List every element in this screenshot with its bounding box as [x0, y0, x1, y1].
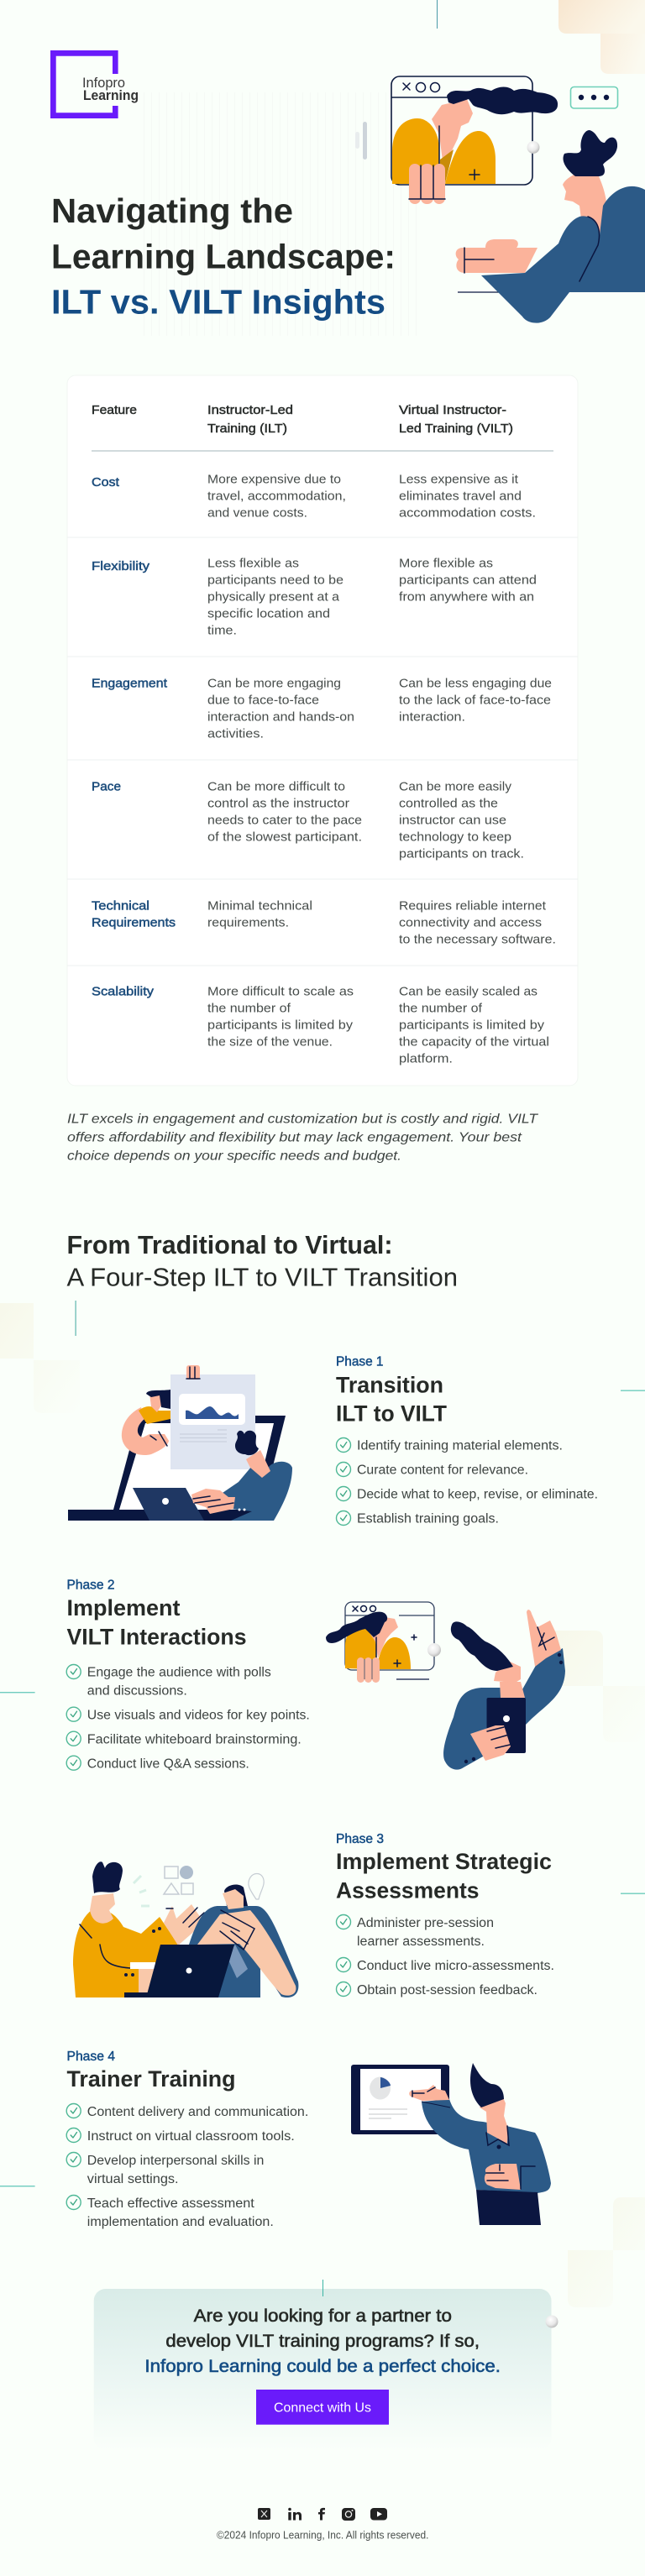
table row: Scalability: participants is limited by — [399, 1018, 545, 1033]
table row: Scalability: Can be easily scaled as — [399, 985, 538, 999]
table header row — [92, 403, 513, 436]
phase 2 text block: Phase 2 — [67, 1579, 114, 1593]
panel: call to action: Infopro Learning could be a perfect choice. — [144, 2357, 501, 2376]
title: Navigating the — [51, 191, 293, 230]
hero illustration: woman in video window and man at desk — [355, 76, 645, 323]
phase 4 text block: Phase 4 — [67, 2050, 115, 2064]
phase 3 text block: Phase 3 — [336, 1832, 384, 1846]
phase 1 text block: Curate content for relevance. — [357, 1463, 528, 1478]
checklist item icon — [66, 2104, 81, 2118]
panel: call to action: Are you looking for a partner to — [194, 2306, 452, 2326]
checklist item icon — [66, 1707, 81, 1721]
panel: call to action: develop VILT training programs? If so, — [165, 2332, 480, 2351]
table row: Flexibility: specific location and — [207, 607, 330, 621]
phase 2 text block: Facilitate whiteboard brainstorming. — [87, 1733, 302, 1747]
icon: YouTube — [370, 2508, 387, 2521]
phase 1 text block: Decide what to keep, revise, or eliminate. — [357, 1488, 598, 1502]
table row: Engagement: interaction and hands-on — [207, 710, 354, 725]
table row: Flexibility — [92, 557, 537, 638]
table row: Pace — [92, 780, 524, 861]
table row: Pace: control as the instructor — [207, 797, 349, 811]
table header row: Instructor-Led — [207, 403, 293, 417]
title: ILT vs. VILT Insights — [51, 282, 385, 321]
phase 4 text block — [66, 2050, 308, 2229]
table row: Engagement: Can be more engaging — [207, 677, 341, 691]
table row: Engagement: Engagement — [92, 677, 168, 691]
icon: X — [258, 2508, 270, 2520]
table header row: Led Training (VILT) — [399, 421, 513, 436]
checklist item icon — [336, 1914, 351, 1929]
phase 1 illustration: two people around a monitor and document — [68, 1365, 292, 1521]
phase 4 text block: Instruct on virtual classroom tools. — [87, 2129, 295, 2144]
table row: Technical Requirements: Minimal technical — [207, 899, 312, 914]
phase 2 text block: and discussions. — [87, 1684, 187, 1699]
checklist item icon — [66, 2195, 81, 2210]
phase 4 text block: virtual settings. — [87, 2172, 179, 2186]
table row: Flexibility: More flexible as — [399, 557, 493, 571]
phase 4 text block: implementation and evaluation. — [87, 2215, 274, 2229]
table row: Scalability: the number of — [399, 1002, 483, 1016]
table row: Flexibility: participants need to be — [207, 573, 343, 588]
phase 4 text block: Trainer Training — [67, 2066, 235, 2092]
button: Connect with Us — [256, 2390, 389, 2425]
table row: Flexibility: from anywhere with an — [399, 590, 534, 605]
table row: Pace: Pace — [92, 780, 121, 794]
checklist item icon — [66, 2128, 81, 2143]
phase 4 text block: Content delivery and communication. — [87, 2105, 308, 2119]
checklist item icon — [336, 1463, 351, 1476]
table row: Pace: controlled as the — [399, 797, 498, 811]
checklist item icon — [66, 2153, 81, 2166]
table header row: Feature — [92, 403, 137, 417]
table row: Scalability: the size of the venue. — [207, 1035, 333, 1050]
checklist item icon — [336, 1486, 351, 1501]
summary text: offers affordability and flexibility but may lack engagement. Your best — [67, 1131, 522, 1145]
table row: Technical Requirements: Technical — [92, 899, 149, 914]
table row: Technical Requirements: Requires reliable internet — [399, 899, 547, 914]
phase 3 text block: Implement Strategic — [336, 1849, 552, 1874]
icon: LinkedIn — [288, 2508, 302, 2521]
phase 3 text block: Assessments — [336, 1878, 479, 1903]
phase 2 text block: Implement — [67, 1595, 181, 1620]
phase 3 text block: learner assessments. — [357, 1935, 485, 1949]
checklist item icon — [336, 1511, 351, 1525]
phase 3 illustration: two colleagues with a laptop — [73, 1861, 298, 1997]
table row: Technical Requirements: connectivity and access — [399, 916, 542, 930]
table row: Scalability — [92, 985, 549, 1066]
table row: Cost: Less expensive as it — [399, 473, 519, 487]
table row: Cost — [92, 473, 536, 521]
phase 1 text block: Transition — [336, 1373, 443, 1398]
phase 1 text block: Phase 1 — [336, 1355, 383, 1369]
table row: Technical Requirements — [92, 899, 556, 947]
phase 1 text block: Establish training goals. — [357, 1512, 499, 1526]
table row: Scalability: More difficult to scale as — [207, 985, 354, 999]
logo: Infopro Learning: Learning — [83, 87, 139, 103]
table row: Flexibility: time. — [207, 624, 237, 638]
section heading: A Four-Step ILT to VILT Transition — [67, 1263, 458, 1292]
phase 4 illustration: trainer pointing at tablet screen — [351, 2063, 551, 2225]
checklist item icon — [66, 1664, 81, 1679]
table row: Flexibility: participants can attend — [399, 573, 537, 588]
table header row: Virtual Instructor- — [399, 403, 506, 417]
table row: Scalability: platform. — [399, 1052, 453, 1066]
table row: Cost: travel, accommodation, — [207, 490, 346, 504]
table row: Engagement: to the lack of face-to-face — [399, 694, 551, 708]
table row: Scalability: Scalability — [92, 985, 155, 999]
summary text — [67, 1113, 538, 1164]
phase 1 text block: ILT to VILT — [336, 1401, 447, 1427]
table row: Flexibility: Flexibility — [92, 559, 150, 573]
copyright: ©2024 Infopro Learning, Inc. All rights reserved. — [217, 2529, 428, 2541]
table row: Scalability: participants is limited by — [207, 1018, 354, 1033]
summary text: choice depends on your specific needs and budget. — [67, 1149, 401, 1164]
table row: Cost: eliminates travel and — [399, 490, 522, 504]
table row: Pace: of the slowest participant. — [207, 830, 362, 845]
section heading — [67, 1230, 458, 1292]
table row: Cost: accommodation costs. — [399, 506, 536, 521]
table row: Technical Requirements: Requirements — [92, 916, 176, 930]
table row: Pace: Can be more easily — [399, 780, 512, 794]
table row: Pace: Can be more difficult to — [207, 780, 345, 794]
table row: Pace: instructor can use — [399, 814, 506, 828]
table row: Scalability: the number of — [207, 1002, 291, 1016]
phase 3 text block: Administer pre-session — [357, 1916, 494, 1930]
table row: Flexibility: physically present at a — [207, 590, 340, 605]
table row: Pace: needs to cater to the pace — [207, 814, 362, 828]
phase 1 text block — [336, 1355, 598, 1526]
table row: Engagement: Can be less engaging due — [399, 677, 552, 691]
table row: Pace: technology to keep — [399, 830, 511, 845]
icon: Facebook — [318, 2508, 325, 2521]
checklist item icon — [66, 1756, 81, 1770]
section heading: From Traditional to Virtual: — [67, 1230, 393, 1259]
phase 2 text block: VILT Interactions — [67, 1624, 247, 1649]
decorative peach corner blocks — [558, 0, 645, 74]
checklist item icon — [336, 1958, 351, 1971]
checklist item icon — [336, 1437, 351, 1453]
logo: Infopro Learning: Infopro — [82, 75, 125, 91]
phase 2 text block: Use visuals and videos for key points. — [87, 1709, 310, 1723]
table row: Engagement: due to face-to-face — [207, 694, 319, 708]
button: Connect with Us: Connect with Us — [274, 2401, 371, 2416]
phase 4 text block: Develop interpersonal skills in — [87, 2154, 264, 2168]
table row: Technical Requirements: requirements. — [207, 916, 289, 930]
table row: Flexibility: Less flexible as — [207, 557, 299, 571]
checklist item icon — [336, 1982, 351, 1997]
table row: Cost: Cost — [92, 475, 120, 490]
table row: Technical Requirements: to the necessary software. — [399, 933, 556, 947]
phase 1 text block: Identify training material elements. — [357, 1439, 563, 1453]
phase 4 text block: Teach effective assessment — [87, 2196, 255, 2211]
table row: Cost: More expensive due to — [207, 473, 341, 487]
title — [51, 191, 396, 321]
phase 2 text block: Engage the audience with polls — [87, 1666, 271, 1680]
title: Learning Landscape: — [51, 237, 396, 275]
panel: call to action — [94, 2280, 558, 2450]
table row: Engagement: activities. — [207, 727, 264, 741]
phase 2 text block — [66, 1579, 310, 1772]
phase 3 text block — [336, 1832, 554, 1997]
phase 2 text block: Conduct live Q&A sessions. — [87, 1757, 249, 1772]
social media icons — [258, 2508, 387, 2521]
icon: Instagram — [342, 2508, 355, 2521]
logo: Infopro Learning — [50, 50, 139, 118]
phase 3 text block: Obtain post-session feedback. — [357, 1983, 538, 1997]
table header row: Training (ILT) — [207, 421, 287, 436]
checklist item icon — [66, 1731, 81, 1746]
phase 3 text block: Conduct live micro-assessments. — [357, 1959, 554, 1973]
table row: Cost: and venue costs. — [207, 506, 307, 521]
phase 2 illustration: video window and man with tablet — [326, 1602, 565, 1770]
table row: Scalability: the capacity of the virtual — [399, 1035, 549, 1050]
panel: comparison table — [67, 375, 578, 1086]
table row: Engagement: interaction. — [399, 710, 465, 725]
summary text: ILT excels in engagement and customization but is costly and rigid. VILT — [67, 1113, 538, 1127]
table row: Pace: participants on track. — [399, 847, 524, 861]
table row: Engagement — [92, 677, 552, 741]
